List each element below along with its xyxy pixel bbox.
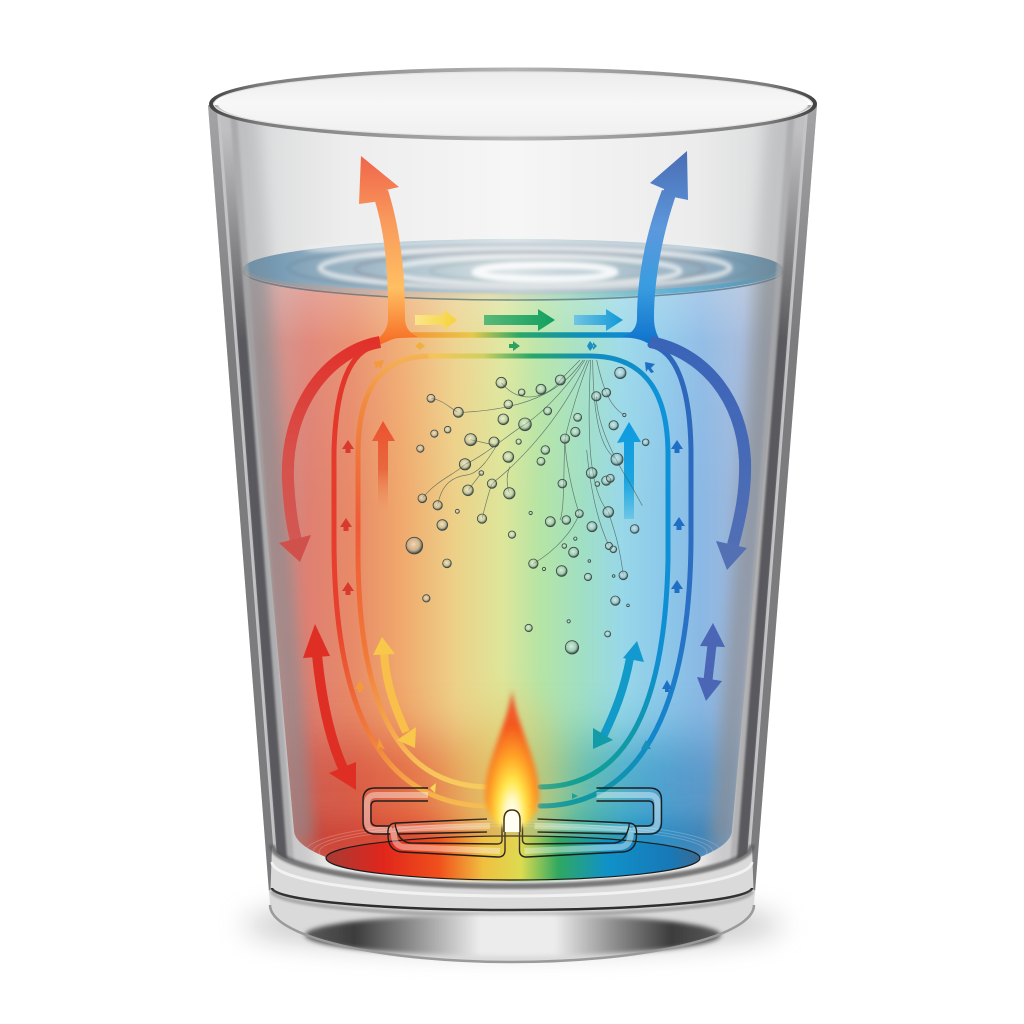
glass tumbler [208, 70, 817, 962]
flow arrow: blue double headed [697, 623, 725, 701]
bubbles and filaments [406, 360, 649, 654]
flow arrow: teal double headed [593, 641, 644, 749]
inner left loop line [358, 356, 490, 787]
flow arrow: big blue descending [650, 342, 747, 570]
horizontal arrow green [484, 309, 555, 331]
flow arrow: big red descending [279, 342, 380, 562]
glass rim [211, 70, 815, 138]
horizontal arrow yellow [415, 310, 457, 330]
water volume with heat gradient [244, 273, 782, 882]
thick glass base [270, 845, 754, 962]
left glass wall [212, 105, 298, 890]
inner top connecting line [430, 354, 590, 358]
bubble cloud [406, 367, 649, 654]
top channel line [400, 332, 634, 338]
right glass wall [726, 105, 813, 890]
burner coil [363, 788, 662, 857]
coil left half [363, 788, 512, 857]
flow arrow: yellow double headed [373, 637, 416, 748]
flow arrow: red double headed [303, 624, 356, 790]
glass body [208, 105, 817, 962]
drop shadow under glass [243, 901, 783, 949]
flow arrow: blue up and out of water [622, 151, 688, 346]
bottom colored heat pool [326, 836, 700, 880]
inner right loop line [540, 356, 668, 787]
branching filaments [422, 360, 642, 575]
outer left loop line [334, 345, 490, 806]
convection loop lines [334, 335, 691, 806]
candle flame [466, 690, 558, 850]
flow arrow: orange up and out of water [359, 156, 418, 346]
water surface with ripples [243, 239, 783, 300]
outer right loop line [540, 345, 691, 806]
straight rising arrow right [617, 422, 641, 519]
small flow markers [340, 341, 685, 799]
horizontal arrow blue [574, 309, 623, 331]
coil right half [512, 788, 662, 857]
straight rising arrow left [372, 421, 395, 517]
